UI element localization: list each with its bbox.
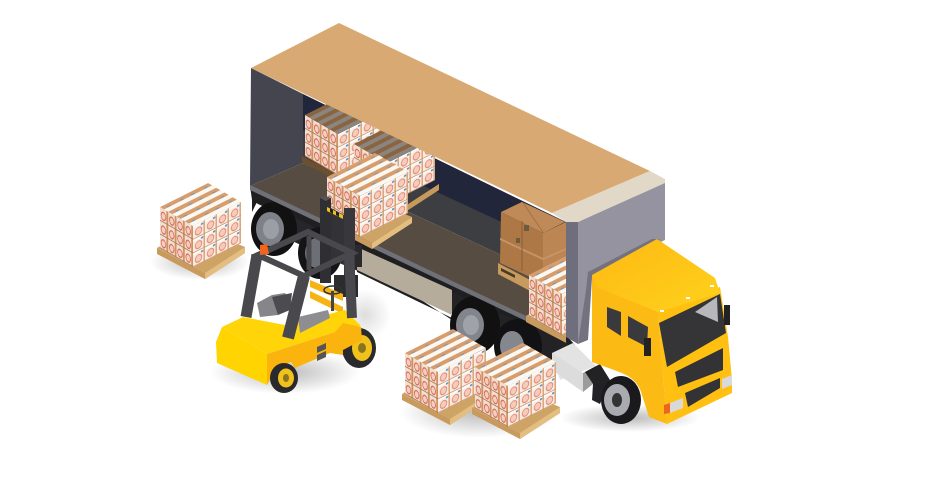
truck trailer [250,23,665,373]
body front [216,327,267,385]
lower grille [685,378,720,407]
seat [257,293,330,333]
rear door wall [250,68,303,186]
cab front [658,287,732,424]
rear wheel [251,202,297,256]
wheel: rear right [342,328,376,368]
illustration: forklift loading pallets into a truck [156,23,732,439]
chassis behind cab wheel [585,364,610,404]
roof lights [660,285,714,312]
overhead guard [246,232,352,338]
headlights [664,375,732,414]
trailer chassis and arches [250,186,575,362]
beacon [260,244,269,255]
rear cab window [607,307,621,336]
cab roof [592,239,720,312]
stack: left pallet on ground [157,183,245,279]
stack: behind front pillar [526,256,566,343]
mirrors [644,305,730,356]
cardboard boxes [498,202,566,292]
wheel: front [270,363,298,393]
cab shadow on front wall [578,239,660,344]
steering wheel [324,286,342,311]
cab side [592,275,667,424]
roof tan [251,23,650,213]
front wheel [601,376,641,424]
mast [320,196,362,297]
door window [628,316,648,347]
inside far wall [303,94,566,262]
side vents [317,343,326,361]
stack: far left in trailer [302,91,390,187]
body side [267,323,362,385]
truck cab [552,239,732,424]
windshield reflection [695,297,718,322]
lower side panel [357,247,452,315]
roof cream edge [552,171,665,222]
front pillar [566,222,578,344]
front wall [578,181,665,344]
fuel tank [552,343,596,392]
far wall lower band [303,130,566,285]
cargo floor [250,163,566,335]
stack: bottom right pallet [472,343,560,439]
grille [675,348,723,387]
held stack on forks [324,153,412,249]
middle wheels [450,296,542,373]
ground shadows [150,244,700,438]
body top [222,310,361,354]
stack: far right in trailer [351,120,439,216]
forklift [216,196,376,393]
forward rear wheel hidden behind forklift [298,227,342,279]
stack: bottom left pallet [402,329,490,425]
windshield [659,294,726,367]
carriage bars [310,280,343,314]
floor lip [250,185,566,340]
